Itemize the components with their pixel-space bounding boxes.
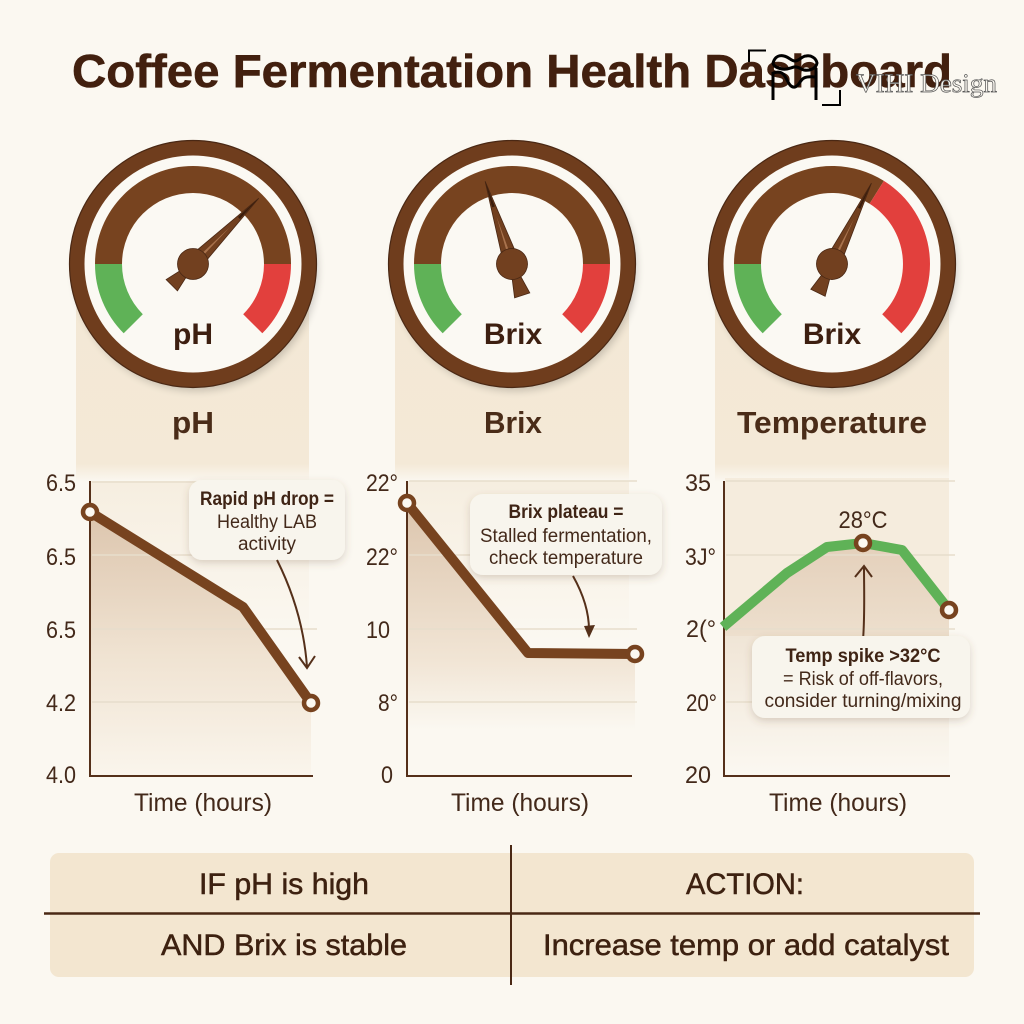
callout: rapid pH drop: activity xyxy=(238,534,296,555)
gauge: Brix: Brix xyxy=(484,318,542,351)
chart: pH: 4.0 xyxy=(46,762,76,789)
decision table: ACTION: xyxy=(686,868,804,901)
chart: Brix: 0 xyxy=(381,762,393,789)
callout: rapid pH drop xyxy=(189,480,345,560)
decision table: Increase temp or add catalyst xyxy=(543,929,950,962)
gauge: pH xyxy=(70,140,318,391)
chart: Brix: 22° xyxy=(366,544,398,571)
chart: Brix: Time (hours) xyxy=(451,789,589,817)
callout: Brix plateau: Brix plateau = xyxy=(508,502,624,523)
watermark text: VIHI Design xyxy=(856,69,997,98)
chart: Temperature: 2(° xyxy=(686,616,716,643)
chart: pH: 6.5 xyxy=(46,544,76,571)
chart: pH: 6.5 xyxy=(46,470,76,497)
heading: Temperature: Temperature xyxy=(737,405,927,440)
callout: Brix plateau xyxy=(470,494,662,575)
chart: Brix: 22° xyxy=(366,470,398,497)
chart: Temperature: Time (hours) xyxy=(769,789,907,817)
arrow: to Brix plateau xyxy=(573,576,595,638)
heading: Brix: Brix xyxy=(484,405,543,440)
gauge: Temperature: Brix xyxy=(803,318,861,351)
column panel: Temperature xyxy=(715,300,949,636)
gauge: pH: pH xyxy=(173,318,213,351)
chart: pH: 6.5 xyxy=(46,617,76,644)
callout: rapid pH drop: Rapid pH drop = xyxy=(200,489,334,510)
column panel: Brix xyxy=(395,300,629,641)
chart: pH xyxy=(46,470,318,817)
decision table: AND Brix is stable xyxy=(161,929,407,962)
gauge: Temperature xyxy=(708,140,957,391)
chart: pH: Time (hours) xyxy=(134,789,272,817)
chart: Brix: 10 xyxy=(366,617,390,644)
chart: Temperature xyxy=(685,470,956,817)
callout: Brix plateau: Stalled fermentation, xyxy=(480,526,652,547)
chart: Temperature: 20° xyxy=(686,690,717,717)
decision table xyxy=(44,845,980,985)
arrow: to temperature peak xyxy=(855,566,872,640)
chart: Temperature: 20 xyxy=(685,762,711,789)
chart: Temperature: 28°C xyxy=(838,507,888,534)
chart: Temperature: 3J° xyxy=(685,544,716,571)
title: Coffee Fermentation Health Dashboard xyxy=(72,45,952,97)
callout: temp spike: = Risk of off-flavors, xyxy=(783,669,943,690)
chart: Brix: 8° xyxy=(378,690,398,717)
chart: Brix xyxy=(366,470,642,817)
callout: rapid pH drop: Healthy LAB xyxy=(217,512,317,533)
chart: pH: 4.2 xyxy=(46,690,76,717)
column panel: pH xyxy=(76,300,309,641)
callout: Brix plateau: check temperature xyxy=(489,548,643,569)
chart: Temperature: 35 xyxy=(685,470,711,497)
callout: temp spike: consider turning/mixing xyxy=(764,691,962,712)
watermark logo xyxy=(749,50,840,105)
callout: temp spike: Temp spike >32°C xyxy=(786,646,941,667)
callout: temp spike xyxy=(752,636,970,718)
heading: pH: pH xyxy=(172,405,214,440)
arrow: to pH drop xyxy=(277,560,315,668)
gauge: Brix xyxy=(388,140,637,391)
decision table: IF pH is high xyxy=(199,868,369,901)
